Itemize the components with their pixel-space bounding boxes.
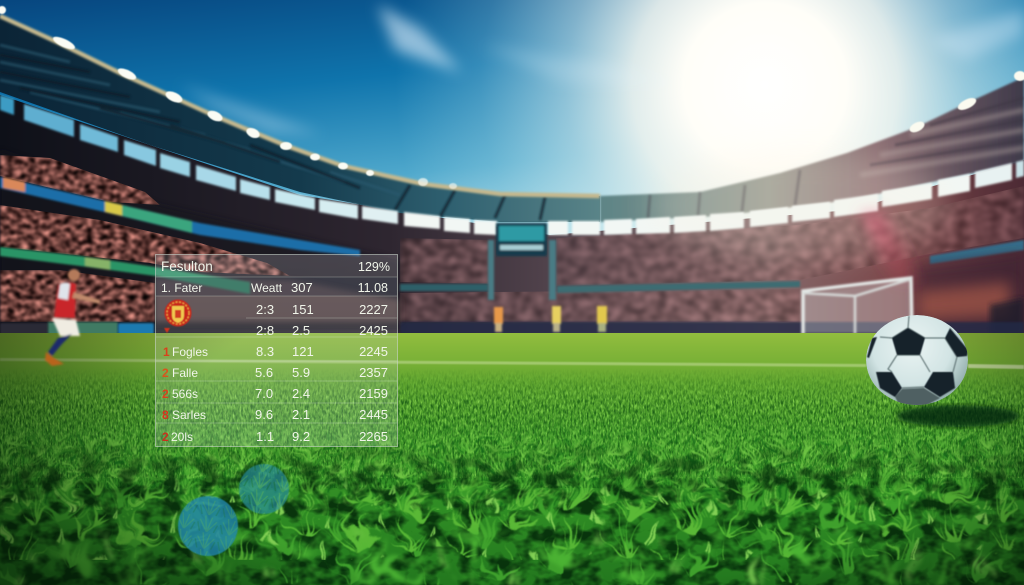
table row: unnamed 3: 2:8 — [256, 323, 274, 338]
table row: Fater: 307 — [291, 280, 313, 295]
table row: Fogles: 8.3 — [256, 344, 274, 359]
table row: Sarles: 8 — [162, 408, 169, 422]
table row: Sarles: 2.1 — [292, 407, 310, 422]
scoreboard with support pillars — [488, 223, 556, 300]
table header: 129% — [358, 260, 390, 274]
table row: unnamed 2: 2:3 — [256, 302, 274, 317]
table row: 20ls: 2265 — [359, 429, 388, 444]
sun haze and lens flare — [650, 150, 950, 285]
table row: Falle: 2 — [162, 366, 169, 380]
table row: 20ls: 9.2 — [292, 429, 310, 444]
table row: Falle: Falle — [172, 366, 198, 380]
distant players in yellow — [494, 306, 607, 332]
table row: Falle: 2357 — [359, 365, 388, 380]
table row: 20ls — [162, 429, 388, 444]
table row: Fater — [161, 280, 388, 295]
roof left — [0, 6, 600, 222]
table header: Fesulton — [161, 259, 213, 274]
table row: unnamed 2: 2227 — [359, 302, 388, 317]
table row: Fater: 11.08 — [358, 281, 388, 295]
table row: Fogles: 2245 — [359, 344, 388, 359]
table header — [161, 259, 390, 274]
goal frame and net — [803, 278, 912, 334]
table row: Falle: 5.9 — [292, 365, 310, 380]
table row: Sarles: Sarles — [172, 408, 206, 422]
table row: Sarles: 2445 — [359, 407, 388, 422]
table row: 20ls: 20ls — [171, 430, 193, 444]
table row: 20ls: 2 — [162, 430, 169, 444]
running player in red kit — [45, 269, 100, 366]
roof windows band — [0, 95, 1024, 235]
table row: Fogles: Fogles — [172, 345, 208, 359]
table row: Fater: Weatt — [251, 281, 283, 295]
table row: Fogles — [163, 344, 388, 359]
table row: Falle — [162, 365, 388, 380]
table row: unnamed 3: 2425 — [359, 323, 388, 338]
stadium stands background — [0, 95, 1024, 340]
table row: 566s: 2 — [162, 387, 169, 401]
club crest icon — [164, 300, 192, 333]
table row: 566s — [162, 386, 388, 401]
table row: Falle: 5.6 — [255, 365, 273, 380]
background: sky with sun glow — [0, 0, 1024, 300]
left crowd tiers and advertising bands — [0, 155, 400, 336]
pitch grass — [0, 333, 1024, 585]
table row: unnamed 2: 151 — [292, 302, 314, 317]
ball shadow — [896, 405, 1020, 427]
table row: unnamed 3 — [256, 323, 388, 338]
table row: unnamed 2 — [256, 302, 388, 317]
table row: unnamed 3: 2.5 — [292, 323, 310, 338]
table row: Fater: 1. Fater — [161, 281, 202, 295]
league table panel — [156, 254, 398, 446]
table row: 566s: 2.4 — [292, 386, 310, 401]
soccer ball — [866, 315, 1020, 427]
table row: Fogles: 121 — [292, 344, 314, 359]
table row: 566s: 7.0 — [255, 386, 273, 401]
table row: 566s: 566s — [172, 387, 198, 401]
blue circles on the grass — [178, 464, 289, 556]
roof right — [600, 71, 1024, 222]
table row: Sarles — [162, 407, 388, 422]
table row: 20ls: 1.1 — [256, 429, 274, 444]
table row: 566s: 2159 — [359, 386, 388, 401]
table row: Sarles: 9.6 — [255, 407, 273, 422]
table row: Fogles: 1 — [163, 345, 170, 359]
